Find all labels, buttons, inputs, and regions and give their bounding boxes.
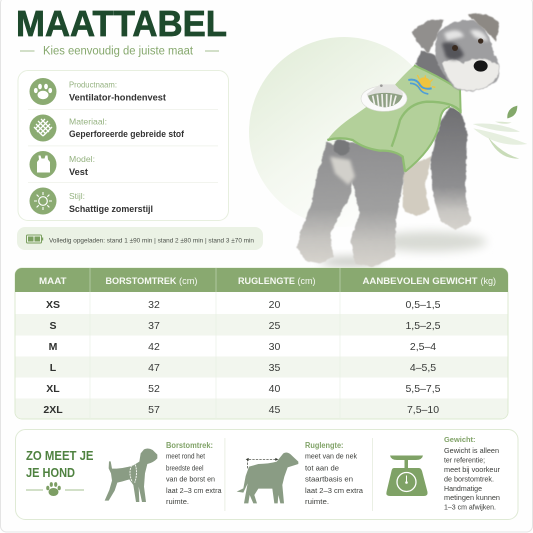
- fan: [361, 84, 407, 111]
- table rows: 2,5–4: [410, 341, 436, 353]
- text: chest girth: [166, 441, 222, 506]
- rump light fur: [330, 157, 355, 185]
- table rows: M: [49, 341, 58, 353]
- panel: how to measure: [16, 430, 518, 520]
- text: back length: tot aan de: [305, 463, 339, 472]
- text: chest girth: breedste deel: [166, 463, 204, 472]
- text: back length: staartbasis en: [305, 474, 353, 484]
- battery strip: [17, 227, 263, 250]
- icon: sun: [30, 188, 56, 214]
- text: back length: meet van de nek: [305, 452, 357, 461]
- table header: (kg): [480, 276, 496, 286]
- table rows: 45: [269, 404, 280, 416]
- icon: scale: [386, 456, 428, 496]
- text: material: Materiaal:: [69, 116, 107, 126]
- head: [412, 14, 499, 91]
- text: material: Geperforeerde gebreide stof: [69, 129, 185, 139]
- table header: AANBEVOLEN GEWICHT: [362, 276, 478, 286]
- text: back length: Ruglengte:: [305, 441, 344, 450]
- text: back length: laat 2–3 cm extra: [305, 486, 364, 495]
- right ear: [468, 14, 499, 42]
- text: chest girth: laat 2–3 cm extra: [166, 486, 222, 495]
- tail: [333, 139, 350, 155]
- text: chest girth: meet rond het: [166, 452, 206, 461]
- table rows: 32: [148, 299, 160, 311]
- table header: (cm): [179, 276, 198, 286]
- rear leg left: [297, 142, 357, 263]
- table rows: 1,5–2,5: [405, 320, 441, 332]
- table rows: 0,5–1,5: [405, 299, 441, 311]
- table rows: 20: [269, 299, 280, 311]
- table rows: 30: [269, 341, 280, 353]
- text: chest girth: ruimte.: [166, 497, 189, 506]
- text: model: Vest: [69, 167, 88, 177]
- table rows: S: [49, 320, 57, 332]
- battery strip: Volledig opgeladen: stand 1 ±90 min | stand 2 ±80 min | stand 3 ±70 min: [49, 238, 254, 244]
- text: weight: 1–3 cm afwijken.: [444, 502, 496, 512]
- table rows: 47: [148, 362, 160, 374]
- measure heading: JE HOND: [26, 466, 75, 480]
- table rows: 5,5–7,5: [405, 383, 441, 395]
- text: style: [69, 191, 153, 214]
- icon: small paw: [46, 482, 61, 496]
- vest logo: [408, 75, 435, 94]
- neck: [415, 50, 458, 90]
- left ear: [412, 19, 444, 53]
- text: style: Stijl:: [69, 191, 85, 201]
- text: model: Model:: [69, 154, 95, 164]
- table rows: 25: [269, 320, 280, 332]
- title: MAATTABEL: [16, 3, 227, 44]
- table rows: 37: [148, 320, 160, 332]
- text: style: Schattige zomerstijl: [69, 204, 153, 214]
- table header: BORSTOMTREK: [106, 276, 177, 286]
- table rows: XS: [46, 299, 60, 311]
- icon: mesh fabric: [30, 114, 56, 142]
- table header: MAAT: [39, 276, 67, 286]
- measure heading: [26, 449, 94, 496]
- table header: [39, 276, 496, 286]
- table rows: 40: [269, 383, 280, 395]
- table rows: 35: [269, 362, 280, 374]
- text: back length: [305, 441, 364, 506]
- measure heading: ZO MEET JE: [26, 449, 94, 463]
- table rows: L: [50, 362, 57, 374]
- text: weight: Gewicht:: [444, 435, 476, 444]
- text: chest girth: Borstomtrek:: [166, 441, 213, 450]
- text: weight: de borstomtrek.: [444, 474, 494, 484]
- subtitle: Kies eenvoudig de juiste maat: [43, 46, 194, 58]
- photo: dog wearing vest: [297, 14, 527, 267]
- table rows: XL: [46, 383, 60, 395]
- table header: (cm): [298, 276, 316, 286]
- icon: dog chest measure: [105, 448, 157, 502]
- table rows: 7,5–10: [407, 404, 439, 416]
- table rows: 52: [148, 383, 160, 395]
- text: weight: Gewicht is alleen: [444, 446, 499, 455]
- icon: dog back measure: [237, 452, 298, 503]
- text: model: [69, 154, 95, 177]
- table rows: [43, 299, 441, 416]
- front leg: [431, 107, 472, 230]
- text: weight: ter referentie;: [444, 456, 485, 464]
- table rows: 42: [148, 341, 160, 353]
- text: chest girth: van de borst en: [166, 474, 215, 484]
- size table: [15, 268, 508, 419]
- backdrop circle: [249, 37, 439, 227]
- text: weight: Handmatige: [444, 484, 482, 493]
- table rows: 4–5,5: [410, 362, 436, 374]
- vest: [327, 65, 461, 172]
- icon: battery: [26, 235, 43, 243]
- icon: paw: [30, 78, 56, 105]
- table rows: 2XL: [43, 404, 63, 416]
- text: product name: [69, 80, 166, 102]
- text: product name: Ventilator-hondenvest: [69, 92, 166, 102]
- rear leg right: [340, 142, 404, 267]
- table rows: 57: [148, 404, 160, 416]
- far front leg: [403, 157, 432, 216]
- icon: leaf and wind swooshes: [473, 106, 527, 159]
- icon: vest: [30, 151, 56, 178]
- panel: product info: [18, 70, 228, 220]
- text: back length: ruimte.: [305, 497, 329, 506]
- text: material: [69, 116, 185, 139]
- text: weight: meet bij voorkeur: [444, 465, 501, 474]
- table header: RUGLENGTE: [238, 276, 295, 286]
- text: product name: Productnaam:: [69, 80, 117, 90]
- text: weight: metingen kunnen: [444, 493, 500, 502]
- text: weight: [444, 435, 501, 512]
